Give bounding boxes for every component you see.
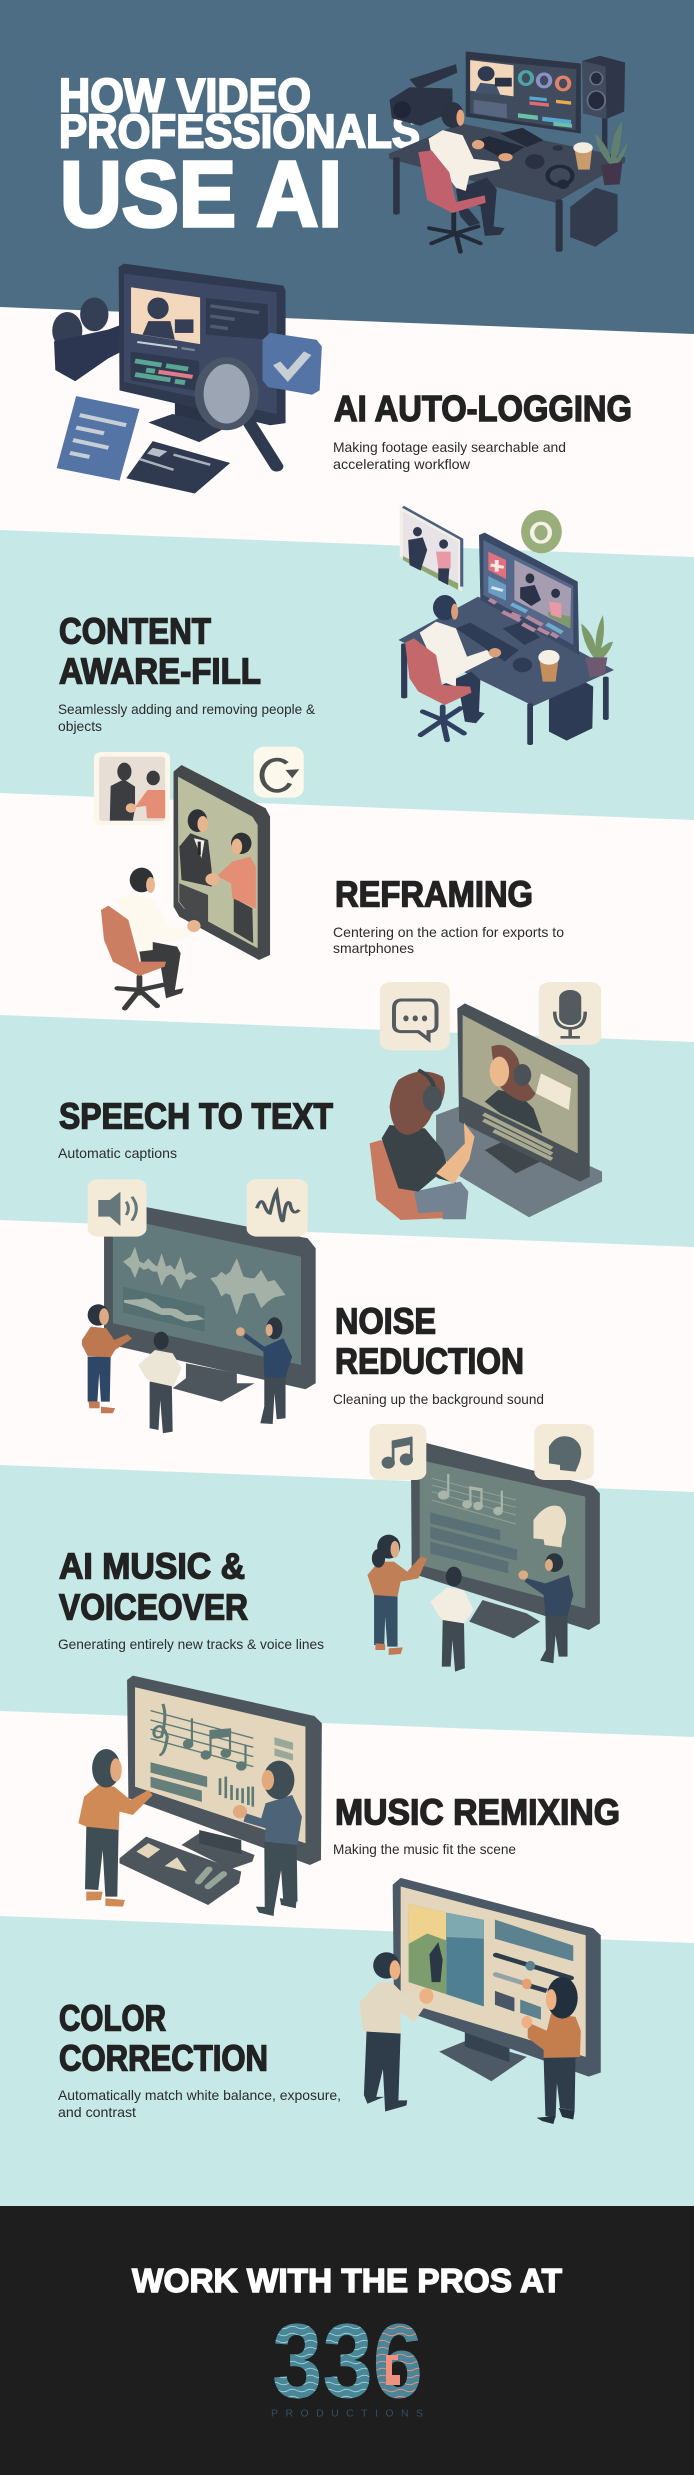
icon: keyboard and mouse [456, 623, 532, 672]
text: color correction description: and contrast [58, 2104, 136, 2120]
illustration: color correction [359, 1878, 601, 2124]
chart: waveforms [123, 1247, 286, 1322]
heading: content aware-fill: CONTENT [59, 610, 211, 652]
text: content aware-fill description: Seamlessly adding and removing people & [58, 701, 316, 717]
icon: document [57, 396, 139, 481]
text: AI music description: Generating entirely new tracks & voice lines [58, 1636, 324, 1652]
person: seated viewer [101, 868, 201, 1008]
person: man in suit [179, 809, 212, 887]
icon: desk [389, 115, 625, 252]
text: content aware-fill description [58, 701, 316, 734]
text: noise reduction description: Cleaning up the background sound [333, 1391, 544, 1407]
icon: monitor [119, 264, 286, 442]
band: header [0, 0, 694, 334]
heading: reframing: REFRAMING [335, 874, 533, 914]
icon: monitor [479, 533, 579, 655]
person: editor seated [418, 102, 513, 252]
icon: monitor [457, 1003, 590, 1182]
person: woman in blue [233, 1761, 302, 1916]
illustration: AI music and voiceover [367, 1424, 600, 1672]
icon: vertical screen [174, 765, 270, 960]
logo: 336 productions: PRODUCTIONS [271, 2408, 423, 2420]
illustration: music remixing [78, 1676, 322, 1916]
icon: tower [570, 188, 618, 247]
icon: music tile [370, 1424, 426, 1480]
icon: check badge [263, 333, 322, 395]
heading: AI music and voiceover [59, 1546, 248, 1628]
heading: content aware-fill [59, 610, 261, 692]
icon: monitor [127, 1676, 322, 1869]
footer heading: WORK WITH THE PROS AT [132, 2263, 563, 2300]
icon: plant [581, 615, 613, 677]
heading: speech to text: SPEECH TO TEXT [59, 1096, 333, 1136]
icon: desk [398, 597, 614, 745]
icon: speaker tile [88, 1179, 147, 1237]
text: auto-logging description: Making footage easily searchable and [333, 439, 566, 455]
icon: microphone tile [539, 982, 601, 1045]
icon: desk [436, 1106, 602, 1217]
text: speech to text description: Automatic captions [58, 1145, 177, 1161]
icon: floating frame [400, 507, 462, 592]
icon: rotate tile [254, 747, 304, 798]
icon: controller [120, 1837, 241, 1905]
heading: noise reduction [335, 1300, 524, 1382]
heading: noise reduction: REDUCTION [335, 1340, 524, 1382]
heading: content aware-fill: AWARE-FILL [59, 650, 261, 692]
band: content aware-fill [0, 530, 694, 820]
icon: tower [549, 677, 593, 741]
logo: 336 productions: 336 [272, 2302, 423, 2420]
illustration: editor at desk [389, 51, 628, 252]
icon: keyboard [471, 136, 525, 160]
text: auto-logging description [333, 439, 566, 472]
heading: AI auto-logging: AI AUTO-LOGGING [334, 388, 632, 429]
icon: card [126, 441, 230, 493]
icon: speech bubble tile [380, 982, 450, 1050]
icon: monitor [393, 1878, 601, 2081]
heading: color correction: CORRECTION [59, 2038, 268, 2078]
icon: mouse and headphones [525, 145, 572, 189]
icon: camera [390, 64, 457, 126]
person: man in salmon shirt [205, 833, 256, 908]
illustration: speech to text [370, 982, 602, 1220]
text: color correction description [58, 2087, 341, 2120]
icon: speaker [582, 56, 625, 119]
title: USE AI [60, 142, 342, 246]
band: AI music and voiceover [0, 1465, 694, 1737]
band: speech to text [0, 1015, 694, 1247]
illustration: auto-logging [52, 264, 322, 493]
title [59, 68, 420, 246]
illustration: noise reduction [82, 1179, 316, 1433]
person: woman with headphones [370, 1070, 475, 1220]
person: editor seated [405, 595, 501, 740]
person: woman in orange [82, 1304, 132, 1413]
illustration: reframing [94, 747, 304, 1008]
heading: color correction: COLOR [59, 1998, 166, 2038]
text: content aware-fill description: objects [58, 718, 102, 734]
icon: coffee cup [538, 650, 560, 682]
text: music remixing description: Making the music fit the scene [333, 1841, 516, 1857]
icon: film camera [52, 297, 122, 381]
icon: magnifier [199, 361, 277, 466]
icon: photo tile [94, 752, 170, 825]
heading: AI music and voiceover: VOICEOVER [59, 1586, 248, 1628]
icon: coffee cup [573, 142, 593, 170]
illustration: content aware-fill [398, 507, 614, 745]
icon: green rotate badge [521, 510, 562, 553]
title: PROFESSIONALS [59, 104, 420, 158]
heading: color correction [59, 1998, 268, 2078]
person: woman in orange [522, 1977, 581, 2124]
icon: monitor [411, 1439, 600, 1638]
icon: monitor [466, 51, 581, 147]
icon: monitor [104, 1199, 316, 1402]
title: HOW VIDEO [59, 68, 311, 122]
person: man in navy [518, 1553, 573, 1663]
heading: noise reduction: NOISE [335, 1300, 436, 1342]
text: reframing description: smartphones [333, 940, 414, 956]
band: color correction [0, 1916, 694, 2206]
icon: head tile [534, 1424, 594, 1480]
icon: plant [595, 122, 628, 185]
person: man in white shirt [430, 1567, 474, 1672]
text: reframing description [333, 924, 564, 956]
person: woman in orange [78, 1749, 153, 1907]
heading: music remixing: MUSIC REMIXING [335, 1792, 620, 1832]
person: man in beige [359, 1952, 433, 2111]
band: footer [0, 2206, 694, 2475]
person: woman in orange [367, 1535, 427, 1655]
text: reframing description: Centering on the action for exports to [333, 924, 564, 940]
text: auto-logging description: accelerating workflow [333, 456, 471, 472]
person: man in navy [236, 1317, 292, 1424]
icon: wave tile [247, 1179, 308, 1237]
person: man in white shirt [138, 1332, 182, 1433]
text: color correction description: Automatically match white balance, exposure, [58, 2087, 341, 2103]
heading: AI music and voiceover: AI MUSIC & [59, 1546, 245, 1586]
